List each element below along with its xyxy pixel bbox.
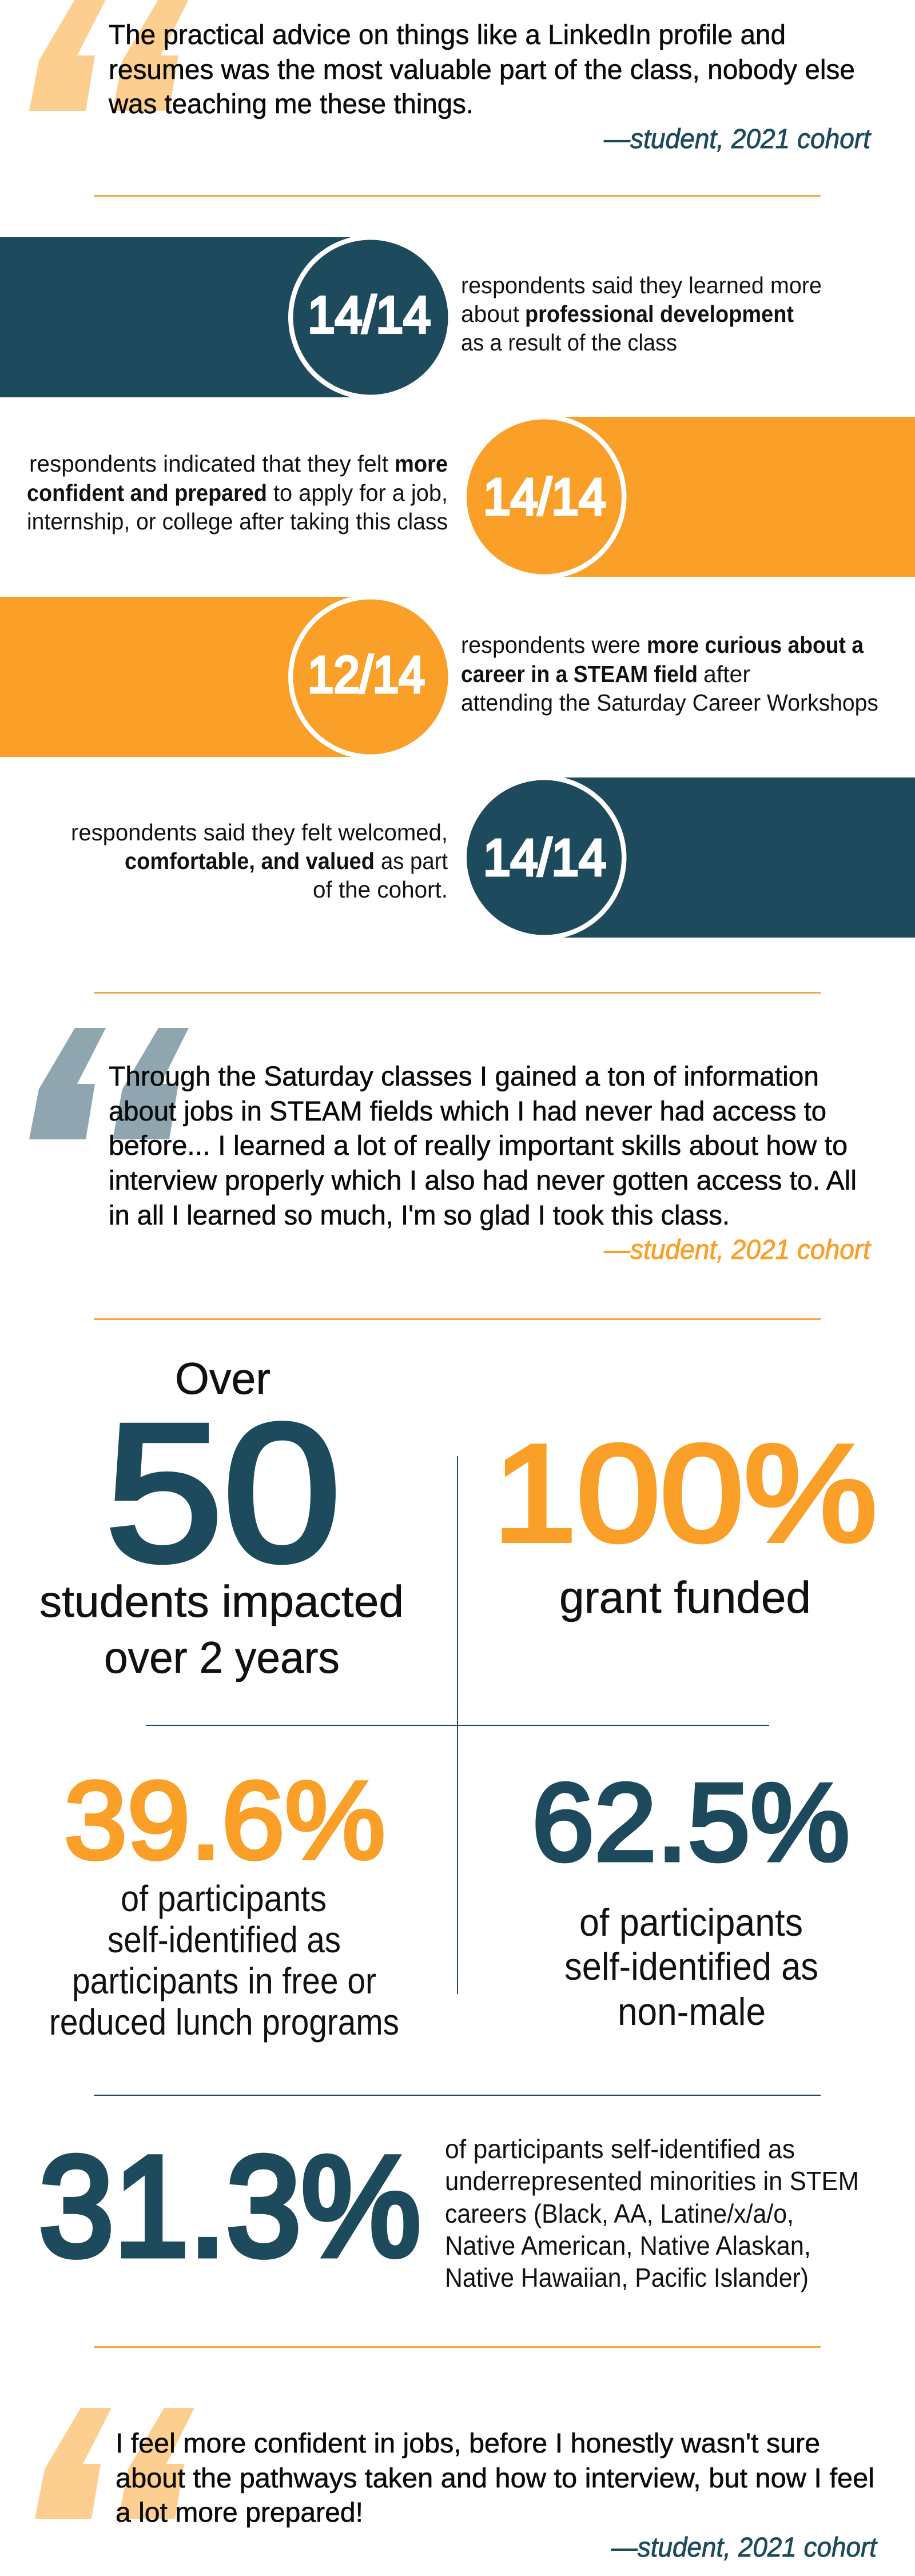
panel: 31.3% underrepresented minorities bbox=[39, 2127, 859, 2292]
stat: 100% grant funded: 100% bbox=[493, 1417, 877, 1570]
stat: over 50 students: Over bbox=[175, 1353, 270, 1403]
description text bbox=[27, 450, 448, 535]
attribution: —student, 2021 cohort bbox=[611, 2533, 878, 2563]
stat: 39.6% free or reduced lunch: reduced lunch programs bbox=[49, 2001, 399, 2043]
stat: 39.6% free or reduced lunch: self-identified as bbox=[108, 1919, 341, 1960]
badge: 14/14 bbox=[288, 235, 453, 400]
description text: more curious about a bbox=[647, 632, 864, 658]
stat: 62.5% non-male: 62.5% bbox=[532, 1760, 850, 1884]
quote text bbox=[108, 20, 855, 119]
bar: orange bbox=[544, 417, 915, 577]
stat: 62.5% non-male: of participants bbox=[579, 1901, 803, 1944]
description text: Native Hawaiian, Pacific Islander) bbox=[445, 2263, 809, 2292]
quote text: about the pathways taken and how to interview, but now I feel bbox=[116, 2463, 874, 2494]
description text: respondents said they learned more bbox=[461, 272, 822, 298]
panel: stat professional development bbox=[0, 235, 822, 400]
description text bbox=[461, 272, 822, 356]
quote text: Through the Saturday classes I gained a ton of information bbox=[109, 1062, 819, 1092]
description text: as part bbox=[381, 848, 448, 874]
quote text: before... I learned a lot of really important skills about how to bbox=[109, 1131, 848, 1161]
quote text: interview properly which I also had never gotten access to. All bbox=[109, 1166, 857, 1196]
description text: about bbox=[461, 301, 520, 327]
stat: 39.6% free or reduced lunch: 39.6% bbox=[64, 1758, 385, 1882]
description text bbox=[461, 632, 878, 716]
stat: 100% grant funded: grant funded bbox=[559, 1572, 811, 1622]
description text: after bbox=[703, 661, 750, 687]
attribution: —student, 2021 cohort bbox=[603, 1235, 872, 1265]
description text: to apply for a job, bbox=[273, 480, 448, 506]
stat: over 50 students: 50 bbox=[105, 1383, 341, 1602]
quote text: a lot more prepared! bbox=[116, 2498, 363, 2528]
bar: navy bbox=[0, 237, 371, 397]
description text bbox=[445, 2134, 859, 2292]
panel: key numbers grid bbox=[39, 1353, 877, 2043]
description text: career in a STEAM field bbox=[461, 661, 698, 687]
quote text bbox=[116, 2429, 874, 2528]
stat: 100% grant funded bbox=[493, 1417, 877, 1622]
quote text bbox=[109, 1062, 857, 1231]
badge: 14/14: 14/14 bbox=[483, 469, 606, 526]
icon: grey-blue quotation mark bbox=[29, 1028, 189, 1139]
stat: over 50 students bbox=[39, 1353, 404, 1682]
panel: stat confidence bbox=[27, 414, 915, 579]
stat: over 50 students: students impacted bbox=[39, 1576, 404, 1626]
stat: 62.5% non-male bbox=[532, 1760, 850, 2033]
badge: 14/14 bbox=[462, 775, 627, 940]
stat: 39.6% free or reduced lunch bbox=[49, 1758, 399, 2043]
description text: attending the Saturday Career Workshops bbox=[461, 689, 878, 716]
stat: 62.5% non-male: non-male bbox=[618, 1990, 766, 2033]
description text: underrepresented minorities in STEM bbox=[445, 2166, 859, 2196]
quote text: I feel more confident in jobs, before I honestly wasn't sure bbox=[116, 2429, 820, 2459]
description text: respondents indicated that they felt bbox=[29, 450, 389, 477]
big number: 31.3% bbox=[39, 2127, 421, 2286]
badge: 12/14: 12/14 bbox=[308, 647, 425, 704]
description text: comfortable, and valued bbox=[125, 848, 375, 874]
quote text: The practical advice on things like a LinkedIn profile and bbox=[109, 20, 786, 50]
bar: navy bbox=[544, 777, 915, 938]
badge: 14/14: 14/14 bbox=[308, 287, 431, 344]
panel: stat belonging bbox=[71, 775, 915, 940]
stat: 39.6% free or reduced lunch: of participants bbox=[121, 1878, 327, 1919]
description text: of participants self-identified as bbox=[445, 2134, 795, 2164]
description text: respondents were bbox=[461, 632, 640, 658]
quote text: was teaching me these things. bbox=[108, 89, 474, 119]
stat: 39.6% free or reduced lunch: participants in free or bbox=[72, 1960, 376, 2001]
description text: as a result of the class bbox=[461, 329, 677, 356]
description text: of the cohort. bbox=[313, 876, 448, 903]
bar: orange bbox=[0, 597, 371, 757]
quote text: about jobs in STEAM fields which I had never had access to bbox=[109, 1096, 826, 1127]
panel: third student quote bbox=[35, 2408, 878, 2563]
description text: confident and prepared bbox=[27, 480, 267, 506]
quote text: in all I learned so much, I'm so glad I took this class. bbox=[109, 1201, 730, 1231]
panel: first student quote bbox=[29, 0, 872, 154]
badge: 12/14 bbox=[288, 595, 453, 759]
stat: over 50 students: over 2 years bbox=[104, 1632, 340, 1682]
panel: second student quote bbox=[29, 1028, 872, 1265]
quote text: resumes was the most valuable part of the class, nobody else bbox=[109, 55, 855, 85]
description text: respondents said they felt welcomed, bbox=[71, 819, 448, 846]
description text: internship, or college after taking this class bbox=[27, 508, 448, 535]
icon: orange quotation mark bbox=[29, 0, 189, 111]
description text bbox=[71, 819, 448, 903]
description text: careers (Black, AA, Latine/x/a/o, bbox=[445, 2199, 794, 2228]
stat: 62.5% non-male: self-identified as bbox=[564, 1945, 818, 1988]
attribution: —student, 2021 cohort bbox=[603, 124, 872, 154]
badge: 14/14 bbox=[462, 414, 627, 579]
panel: stat curiosity bbox=[0, 595, 878, 759]
description text: Native American, Native Alaskan, bbox=[445, 2231, 811, 2260]
icon: orange quotation mark bbox=[35, 2408, 194, 2519]
badge: 14/14: 14/14 bbox=[483, 830, 606, 887]
description text: more bbox=[395, 450, 448, 477]
description text: professional development bbox=[525, 301, 794, 327]
